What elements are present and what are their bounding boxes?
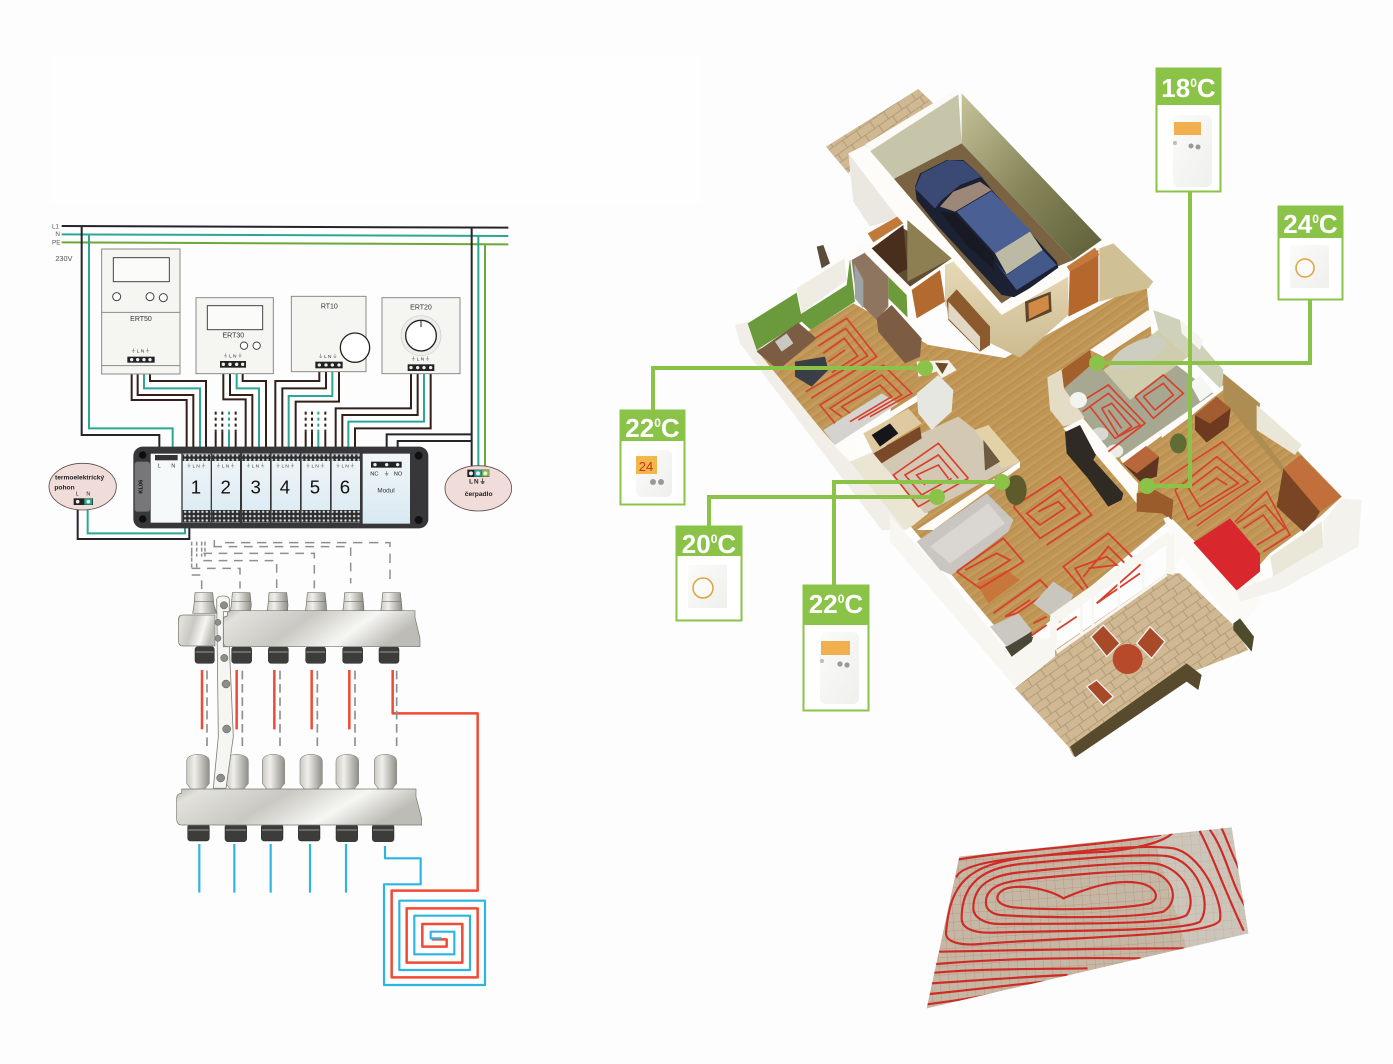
mains bus lines — [62, 226, 508, 539]
bath window — [1180, 320, 1203, 350]
desk — [757, 323, 817, 370]
tub — [1106, 330, 1170, 377]
bedroom right wall — [1223, 373, 1285, 472]
controller unit: KL06 — [139, 480, 145, 494]
module: ⏚ — [384, 470, 389, 477]
sideboard — [877, 305, 922, 363]
thermostat ERT30 — [196, 298, 273, 374]
bedroom floor — [1120, 373, 1342, 590]
card: 22 °C lower — [803, 585, 869, 710]
bath cabinet — [1190, 375, 1213, 402]
thermostat RT10: RT10 — [321, 303, 338, 310]
zone 1: 1 — [191, 477, 201, 498]
zone 6: ⏚LN⏚ — [335, 463, 356, 470]
card: 18 °C: 0 — [1190, 76, 1197, 90]
module: NC — [370, 471, 378, 477]
coffee table — [977, 570, 1020, 603]
card: 22 °C left: 22 — [625, 413, 654, 443]
heating mat photo — [927, 827, 1248, 1008]
kitchen floor — [882, 417, 1018, 513]
door stub — [917, 360, 957, 378]
wardrobe — [852, 252, 888, 320]
bathroom and bedroom — [1047, 310, 1342, 590]
bath frame — [1047, 368, 1085, 427]
controller unit — [133, 447, 428, 528]
card: 20 °C: 20 — [682, 529, 711, 559]
card: 18 °C — [1156, 68, 1221, 192]
room partition — [865, 248, 930, 345]
card: 24 °C: C — [1319, 209, 1338, 239]
zone 5: 5 — [310, 477, 320, 498]
desk chair — [795, 357, 828, 387]
sink — [1092, 427, 1108, 441]
red pipes — [927, 828, 1248, 1004]
outer side face — [848, 153, 902, 227]
kitchen counter — [863, 408, 922, 463]
bath door — [1062, 350, 1093, 388]
rear patio — [826, 89, 933, 173]
low partition — [917, 462, 1020, 530]
thermoelectric actuator: N — [86, 492, 90, 498]
thermoelectric actuator: L — [76, 492, 79, 498]
mounting bracket — [213, 596, 233, 788]
chest — [1195, 397, 1231, 443]
upper fittings — [195, 647, 399, 663]
thermostat ERT20 — [382, 298, 460, 374]
card: 22 °C left: 0 — [654, 416, 661, 430]
window — [797, 258, 847, 313]
chair 2 — [1137, 627, 1165, 658]
zone 2: 2 — [220, 477, 231, 498]
card: 18 °C: 18 — [1161, 73, 1190, 103]
zone 2: ⏚LN⏚ — [216, 463, 236, 470]
bus labels: 230V — [55, 254, 73, 263]
lower valve caps — [187, 754, 397, 791]
zone 3 — [242, 454, 270, 523]
dashed control wires — [192, 540, 390, 590]
grey dashed pipes — [207, 671, 397, 747]
picture — [1025, 292, 1052, 322]
garage floor — [892, 143, 1073, 303]
living room and terrace — [890, 475, 1260, 757]
plant — [1005, 475, 1027, 505]
pump: čerpadlo — [465, 491, 493, 498]
left wall — [890, 515, 1055, 687]
door stub shadow — [935, 363, 948, 374]
right white wall — [1163, 517, 1260, 623]
bedside — [1123, 446, 1159, 482]
back wall cap — [865, 90, 958, 152]
kitchen floor strip — [850, 452, 928, 530]
pump: LN⏚ — [469, 478, 487, 486]
toilet — [1107, 444, 1123, 458]
exterior wall — [1237, 498, 1362, 602]
card: 22 °C left: 24 — [639, 459, 653, 474]
card: 22 °C left: C — [661, 413, 680, 443]
upper valve caps — [193, 593, 402, 613]
thermostat RT10: ⏚LN⏚ — [318, 353, 339, 360]
thermoelectric actuator: pohon — [54, 484, 75, 491]
card: 20 °C: C — [717, 529, 736, 559]
beige core wall — [945, 262, 1068, 358]
card: 24 °C: 0 — [1312, 212, 1319, 226]
thermostat RT10 — [291, 296, 370, 372]
left rooms and kitchen — [735, 240, 1020, 530]
card: 22 °C left — [620, 410, 685, 504]
zone 4: ⏚LN⏚ — [275, 463, 296, 470]
wall stub — [842, 240, 870, 262]
core door — [1067, 248, 1099, 317]
card: 24 °C — [1278, 206, 1343, 300]
hall floor — [880, 280, 1170, 650]
bedroom outer wall — [1237, 498, 1362, 602]
glass wall — [1153, 310, 1223, 390]
thermostat ERT50: ⏚LN⏚ — [131, 348, 151, 355]
garage wing — [826, 89, 1153, 358]
controller unit: L — [158, 464, 161, 470]
zone 1: ⏚LN⏚ — [186, 463, 207, 470]
card: 18 °C: C — [1197, 73, 1216, 103]
fridge — [917, 375, 953, 430]
closet — [863, 217, 955, 318]
serpentines left room and kitchen — [806, 318, 968, 507]
thermostat ERT50 — [102, 249, 180, 374]
zone 6: 6 — [340, 477, 350, 498]
thermostat ERT30: ⏚LN⏚ — [223, 352, 244, 359]
card: 24 °C: 24 — [1283, 209, 1312, 239]
bath wall — [1120, 385, 1223, 464]
tv unit — [1065, 423, 1123, 507]
bus labels — [52, 223, 73, 263]
connector lines — [653, 192, 1310, 586]
garage right wall — [962, 93, 1102, 260]
bath floor — [1064, 365, 1213, 460]
red flow pipes — [202, 670, 478, 977]
lower manifold bar — [177, 789, 422, 825]
tv wall — [1063, 418, 1138, 503]
controller unit: N — [171, 464, 175, 470]
sliding glass door — [1050, 532, 1174, 654]
zone 5 — [302, 454, 330, 523]
patio bench — [817, 245, 830, 268]
module: NO — [394, 471, 403, 477]
thermoelectric actuator — [49, 463, 116, 510]
thermoelectric actuator: termoelektrický — [55, 475, 105, 482]
terrace floor — [1015, 573, 1248, 757]
bedroom door — [1137, 490, 1173, 520]
tub deck — [1103, 330, 1188, 400]
manifolds and pipe loop — [177, 540, 485, 985]
card: 22 °C lower: 0 — [838, 592, 845, 606]
armchair left — [990, 613, 1032, 657]
bus labels: PE — [52, 239, 60, 246]
terrace end wall — [1233, 618, 1254, 652]
card: 20 °C — [676, 526, 742, 620]
card: 22 °C lower: 22 — [809, 589, 838, 619]
table — [1113, 644, 1143, 674]
thermostat wires — [132, 362, 431, 455]
outer left wall — [735, 322, 905, 530]
wall shadow — [1005, 637, 1033, 657]
bedroom window — [1257, 405, 1302, 455]
wardrobe — [1277, 455, 1342, 532]
bed window — [1270, 522, 1323, 577]
closet door — [912, 270, 945, 318]
chair 1 — [1091, 625, 1120, 657]
bus labels: L1 — [52, 223, 60, 230]
thermostat ERT20: ⏚LN⏚ — [411, 356, 431, 363]
kitchen partition — [835, 395, 919, 462]
lower fittings — [188, 824, 394, 842]
garage back wall — [867, 94, 962, 180]
bed — [1193, 518, 1260, 591]
zone 4: 4 — [280, 477, 290, 498]
thick white wall — [848, 145, 1069, 315]
car — [915, 160, 1058, 298]
serpentines living room — [957, 477, 1140, 637]
right beige wall — [1099, 243, 1153, 302]
zone 4 — [272, 454, 300, 523]
upper manifold bar — [178, 611, 420, 647]
green wall — [748, 258, 855, 350]
bar counter — [975, 425, 1020, 471]
wash basin — [1070, 392, 1087, 408]
serpentines bedroom and bath — [1083, 375, 1290, 552]
thermostat ERT50: ERT50 — [130, 316, 152, 323]
terrace low wall — [1070, 663, 1202, 757]
zone 5: ⏚LN⏚ — [305, 463, 326, 470]
armchair right — [1033, 582, 1073, 623]
blue return pipes — [199, 844, 485, 985]
core cabinet — [947, 289, 990, 352]
thermostat ERT30: ERT30 — [223, 333, 244, 340]
laptop — [775, 333, 793, 352]
module — [363, 454, 410, 524]
zone 2 — [212, 454, 240, 523]
isometric house — [735, 89, 1362, 757]
thermostat ERT20: ERT20 — [410, 305, 432, 312]
zone 3: 3 — [250, 477, 261, 498]
module: Modul — [377, 487, 395, 494]
left room sofa — [823, 393, 898, 445]
card: 22 °C lower: C — [844, 589, 863, 619]
card: 20 °C: 0 — [711, 532, 718, 546]
zone 1 — [183, 454, 211, 523]
plant — [1170, 433, 1187, 453]
bus labels: N — [55, 231, 60, 238]
bath back wall — [1090, 310, 1155, 357]
connector dots — [917, 355, 1155, 505]
chair 3 — [1087, 680, 1113, 705]
zone 6 — [332, 454, 360, 523]
pump — [445, 466, 512, 511]
wiring diagram — [49, 223, 512, 539]
large sofa — [917, 493, 1013, 575]
left room floor — [757, 303, 932, 445]
zone 3: ⏚LN⏚ — [246, 463, 266, 470]
